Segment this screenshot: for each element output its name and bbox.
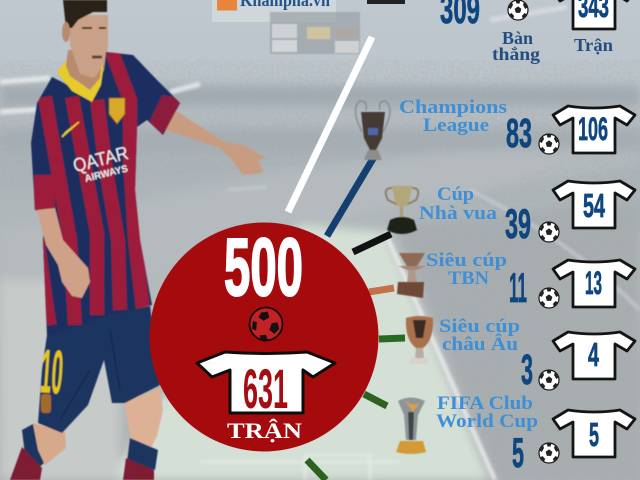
- row: FIFA Club World Cup: 5: [512, 429, 524, 476]
- row: FIFA Club World Cup: 5: [589, 416, 599, 453]
- label: Nhà vua: [419, 203, 498, 224]
- column header: goals: Bàn: [502, 28, 533, 48]
- connector lines: [288, 37, 405, 480]
- row: FIFA Club World Cup: [436, 393, 635, 476]
- top trophy base fragment: [367, 0, 405, 4]
- icon: champions league trophy: [355, 101, 390, 160]
- icon: red ball: [250, 308, 282, 340]
- player left arm: [37, 208, 90, 298]
- scoreboard: [270, 12, 360, 54]
- player right leg: [123, 388, 163, 480]
- row: Cup Nha vua: 54: [583, 187, 605, 224]
- label: Siêu cúp: [426, 250, 507, 271]
- label: TBN: [448, 268, 489, 289]
- icon: copa del rey trophy: [386, 186, 418, 234]
- label: Siêu cúp: [439, 316, 520, 337]
- player photo: [10, 0, 266, 480]
- jersey crest: [109, 98, 125, 124]
- column header: goals: [492, 28, 540, 64]
- player jersey: [31, 52, 190, 336]
- label: [439, 316, 520, 355]
- row: Sieu cup TBN: 13: [585, 265, 602, 301]
- player right arm: [165, 105, 266, 175]
- label: [399, 97, 507, 136]
- row: Sieu cup chau Au: 3: [521, 346, 533, 394]
- jersey collar: [57, 60, 103, 102]
- row: Sieu cup TBN: [426, 250, 635, 311]
- shirt with total matches: [197, 352, 335, 420]
- player neck and head: [62, 0, 108, 96]
- icon: spanish super cup trophy: [397, 253, 426, 298]
- player left leg: [10, 423, 66, 480]
- shirt with total matches: 631: [243, 357, 288, 420]
- column header: matches: Trận: [574, 35, 613, 55]
- row: Champions League: 106: [578, 111, 608, 147]
- row: Sieu cup TBN: 11: [509, 264, 527, 311]
- jersey swoosh: [62, 122, 79, 137]
- label: [426, 250, 507, 289]
- column header: goals: thắng: [492, 44, 540, 64]
- matches label: TRẬN: [227, 418, 302, 443]
- label: FIFA Club: [437, 393, 533, 414]
- row: La Liga: [440, 0, 635, 32]
- label: League: [423, 115, 489, 136]
- row: Champions League: 83: [506, 110, 532, 156]
- logo banner: [212, 0, 336, 22]
- label: Cúp: [437, 184, 474, 205]
- red stat circle: [150, 222, 378, 452]
- jersey sponsor: AIRWAYS: [84, 163, 129, 185]
- jersey sponsor: QATAR: [71, 143, 131, 177]
- row: Cup Nha vua: [419, 181, 635, 247]
- icon: club world cup trophy: [396, 398, 426, 454]
- player shorts: [38, 306, 160, 433]
- player shorts: 10: [38, 337, 65, 408]
- row: Champions League: [399, 97, 635, 156]
- label: Champions: [399, 97, 507, 118]
- label: châu Âu: [442, 333, 518, 355]
- row: Sieu cup chau Au: 4: [588, 336, 599, 373]
- icon: european super cup trophy: [406, 316, 433, 364]
- total goals: 500: [224, 222, 303, 313]
- label: [436, 393, 538, 432]
- row: Sieu cup chau Au: [439, 316, 635, 394]
- label: [419, 184, 498, 224]
- label: World Cup: [436, 411, 538, 432]
- row: Cup Nha vua: 39: [505, 200, 531, 247]
